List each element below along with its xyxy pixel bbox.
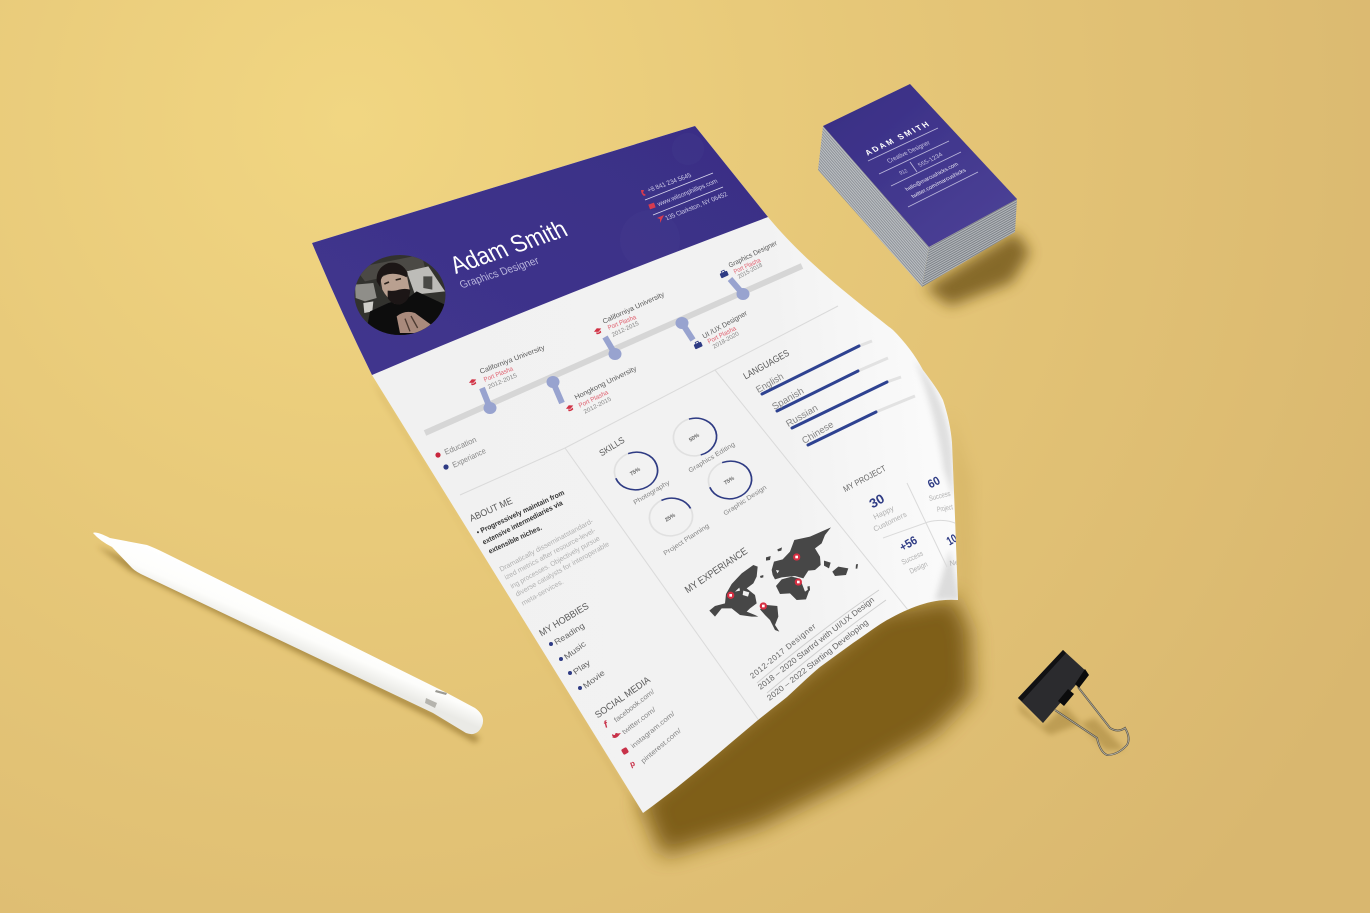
binder clip — [1018, 650, 1129, 755]
resume paper — [312, 126, 966, 813]
pen body — [93, 533, 483, 734]
timeline nodes — [484, 288, 750, 414]
paper curl shading — [918, 366, 958, 600]
about me bold lead: extensive intermediaries via — [481, 498, 565, 547]
about me bold lead: • Progressively maintain from — [475, 488, 566, 537]
card text: 912 — [898, 169, 909, 176]
header decoration circles — [620, 133, 704, 270]
paper shadow — [372, 378, 975, 856]
my hobbies: Reading — [553, 621, 586, 647]
experience list: 2012-2017 Designer — [748, 622, 818, 680]
skill ring: project planning 25%: 25% — [664, 513, 677, 524]
languages: Spanish — [770, 386, 806, 413]
skill ring: graphics editing 50%: 50% — [688, 433, 701, 444]
languages — [742, 341, 915, 447]
card text: ADAM SMITH — [863, 120, 931, 157]
timeline entry: Californiya University 2012 — [468, 344, 546, 391]
skill ring: project planning 25% — [641, 490, 711, 557]
stat: success project: Project — [936, 502, 954, 514]
skill ring: graphic design 75%: 75% — [723, 476, 736, 487]
name: Adam Smith — [445, 216, 572, 279]
skill ring: photography 75%: 75% — [629, 467, 642, 478]
pen band — [425, 698, 437, 708]
pen — [93, 533, 483, 743]
my hobbies — [537, 601, 607, 691]
pen shadow — [97, 546, 480, 743]
timeline stems — [482, 279, 743, 408]
timeline entry: Hongkong University — [565, 365, 638, 416]
stat: cut off — [946, 534, 957, 566]
job title: Graphics Designer — [458, 255, 542, 291]
stat: success project: Success — [928, 489, 951, 503]
languages: Chinese — [800, 419, 836, 447]
skill ring: graphics editing 50%: Graphics Editing — [687, 441, 737, 474]
timeline entry: UI UX Designer — [693, 310, 749, 350]
about me paragraph: Dramatically disseminatstandard- — [499, 518, 595, 574]
card text: hello@marcushicks.com — [904, 162, 960, 193]
section dividers — [460, 306, 957, 722]
card text — [863, 120, 978, 207]
business card stack — [818, 84, 1017, 287]
contact block — [641, 172, 729, 223]
about me bold lead: extensible niches. — [487, 523, 543, 556]
card top — [823, 84, 1017, 247]
stat: success project: 60 — [925, 473, 943, 491]
timeline entry: Graphics Designer: Port Plasha — [733, 257, 762, 276]
card stack shadow — [925, 232, 1030, 306]
legend: Education — [443, 435, 478, 457]
map gaps — [735, 570, 779, 597]
about me paragraph: meta-services. — [521, 579, 565, 607]
stat: happy customers: 30 — [866, 491, 887, 511]
language bars — [762, 346, 887, 445]
timeline — [425, 266, 802, 433]
contact block: +8 841 234 5645 — [646, 172, 693, 194]
timeline entry: Hongkong University: 2012-2015 — [583, 396, 613, 416]
social media — [593, 674, 683, 769]
card text: 555-1234 — [917, 151, 945, 169]
stat: success design: Success — [900, 549, 925, 567]
contact block: www.wilsonphillips.com — [655, 178, 720, 208]
map pins — [727, 553, 802, 610]
legend — [435, 435, 488, 470]
languages: English — [754, 371, 786, 396]
card text: twitter.com/marcushicks — [910, 168, 968, 200]
about me paragraph: diverse catalysts for interoperable — [515, 541, 611, 598]
my project: MY PROJECT — [841, 463, 888, 494]
stat: happy customers: Happy — [872, 503, 896, 522]
skill ring: graphic design 75% — [702, 454, 768, 517]
card text: Creative Designer — [886, 140, 933, 165]
my project — [843, 465, 957, 574]
my hobbies: Music — [562, 639, 588, 662]
stack left side — [818, 126, 929, 287]
clip shadow — [1018, 702, 1125, 750]
timeline entry: Californiya University 2: Port Plasha — [607, 314, 638, 332]
stat: cut off: 10 — [944, 531, 960, 548]
experience list: 2020 – 2022 Starting Developing — [765, 618, 870, 703]
social media: instagram.com/ — [630, 711, 677, 750]
about me paragraph: ing processes. Objectively pursue — [510, 535, 601, 590]
social media: pinterest.com/ — [640, 728, 683, 765]
stat: happy customers: Customers — [872, 510, 908, 534]
timeline entry: Hongkong University: Hongkong University — [574, 365, 638, 402]
languages: LANGUAGES — [742, 348, 792, 382]
social icons: p — [629, 759, 636, 769]
social media: facebook.com/ — [613, 688, 656, 724]
timeline entry: Californiya University 2: 2012-2015 — [611, 321, 641, 339]
about me bold lead — [475, 488, 566, 556]
timeline entry: Californiya University 2 — [593, 291, 666, 339]
about me: ABOUT ME — [468, 496, 514, 524]
timeline entry: Californiya University 2012: Californiya University — [479, 344, 546, 376]
skill ring: photography 75% — [608, 445, 672, 506]
skills — [597, 413, 768, 557]
timeline entry: Californiya University 2012: Port Plasha — [483, 365, 515, 384]
timeline entry: Hongkong University: Port Plasha — [578, 389, 610, 410]
social media: SOCIAL MEDIA — [593, 674, 653, 721]
languages: Russian — [784, 403, 820, 430]
social icons: f — [603, 719, 610, 731]
profile photo — [354, 255, 446, 335]
about me — [468, 488, 611, 607]
contact block: 135 Clarkston, NY 06452 — [664, 191, 729, 222]
stat: success design: +56 — [897, 533, 920, 554]
timeline entry: UI UX Designer: UI /UX Designer — [702, 310, 749, 340]
my experience heading: MY EXPERIANCE — [683, 546, 750, 596]
stack right side — [922, 199, 1017, 287]
stat: success design — [900, 536, 928, 574]
social media: twitter.com/ — [621, 707, 657, 736]
timeline entry: Graphics Designer: Graphics Designer — [728, 240, 779, 270]
legend: Experiance — [451, 446, 488, 470]
stat: success project — [928, 476, 954, 512]
about me paragraph — [499, 518, 611, 607]
skill ring: photography 75%: Photography — [632, 479, 672, 506]
timeline entry: UI UX Designer: 2018-2020 — [712, 331, 741, 350]
experience list: 2018 – 2020 Startrd with UI/UX Design — [756, 595, 876, 692]
skill ring: graphic design 75%: Graphic Design — [722, 484, 768, 517]
timeline entry: Californiya University 2: Californiya University — [602, 291, 666, 326]
language tracks — [858, 341, 915, 412]
about me paragraph: ized metrics after resource-level- — [504, 527, 598, 582]
my hobbies: MY HOBBIES — [537, 601, 591, 639]
timeline entry: UI UX Designer: Port Plasha — [707, 325, 738, 346]
timeline entry: Graphics Designer: 2015-2018 — [737, 262, 764, 281]
timeline entry: Californiya University 2012: 2012-2015 — [487, 373, 519, 391]
stat: cut off: New — [949, 556, 966, 568]
skill ring: project planning 25%: Project Planning — [662, 522, 711, 557]
experience list — [748, 590, 886, 703]
skills: SKILLS — [597, 435, 626, 458]
social icons — [603, 719, 636, 769]
stat: success design: Design — [908, 559, 929, 576]
stat: happy customers — [869, 494, 907, 531]
my hobbies: Movie — [581, 668, 607, 691]
world map — [709, 527, 858, 632]
skill ring: graphics editing 50% — [668, 413, 737, 474]
timeline entry: Graphics Designer — [719, 240, 779, 281]
my hobbies: Play — [571, 658, 592, 677]
header band — [312, 126, 768, 375]
